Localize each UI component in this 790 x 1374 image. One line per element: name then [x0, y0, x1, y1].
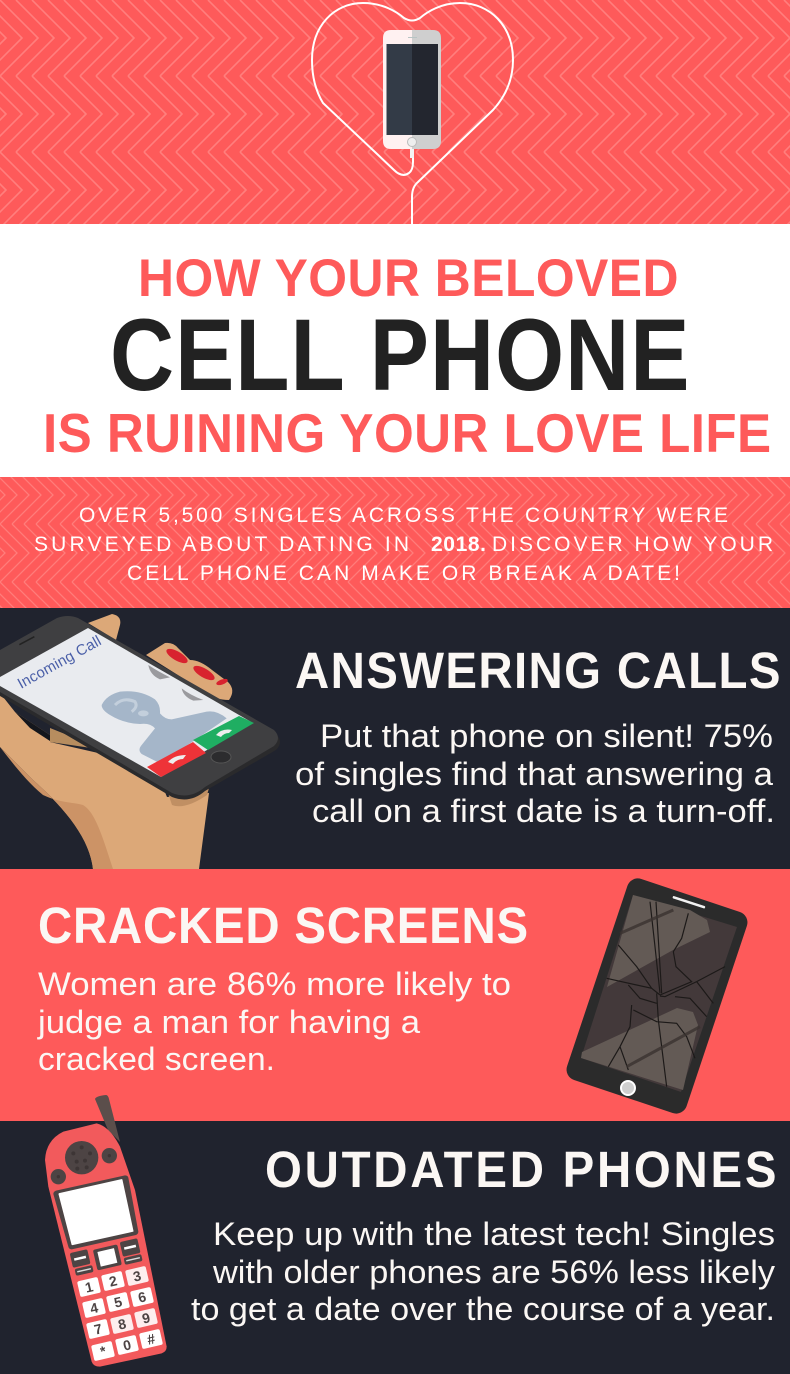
- keypad: 8: [116, 1315, 128, 1333]
- heading: is ruining your love life: IS RUINING YOUR LOVE LIFE: [43, 403, 771, 464]
- icon: hand holding phone with incoming call: [0, 614, 280, 869]
- text: outdated phones body: with older phones are 56% less likely: [212, 1254, 775, 1290]
- panel: header banner with heart cable and phone: [0, 0, 790, 224]
- keypad: 0: [121, 1336, 133, 1354]
- keypad: 5: [112, 1293, 124, 1311]
- panel: survey introduction: [0, 477, 790, 608]
- icon: smartphone: [383, 30, 441, 158]
- text: intro line 2 continued: DISCOVER HOW YOUR: [492, 533, 773, 556]
- text: cracked screens body: cracked screen.: [38, 1041, 275, 1077]
- text: outdated phones body: to get a date over the course of a year.: [191, 1291, 775, 1327]
- text: outdated phones body: Keep up with the latest tech! Singles: [213, 1216, 775, 1252]
- text: answering calls body: [295, 718, 775, 829]
- text: cracked screens body: judge a man for having a: [37, 1004, 420, 1040]
- panel: answering calls: [0, 608, 790, 869]
- text: intro line 2: SURVEYED ABOUT DATING IN: [34, 533, 409, 556]
- heading: how your beloved: HOW YOUR BELOVED: [138, 248, 678, 307]
- text: answering calls body: call on a first date is a turn-off.: [312, 793, 775, 829]
- keypad: 1: [83, 1278, 95, 1296]
- keypad: 7: [92, 1320, 104, 1338]
- keypad: 6: [136, 1288, 148, 1306]
- panel: white title area: [0, 224, 790, 477]
- text: cracked screens body: [37, 966, 511, 1077]
- text: incoming call label: Incoming Call: [15, 633, 104, 692]
- heading: cell phone: CELL PHONE: [110, 298, 689, 412]
- keypad: 4: [88, 1299, 100, 1317]
- text: intro line 3: CELL PHONE CAN MAKE OR BREAK A DATE!: [127, 562, 680, 585]
- text: cracked screens body: Women are 86% more likely to: [38, 966, 511, 1002]
- panel: outdated phones: [0, 1095, 790, 1374]
- icon: outdated red mobile phone: [45, 1095, 167, 1367]
- text: intro year: 2018.: [431, 533, 486, 556]
- text: outdated phones body: [191, 1216, 775, 1327]
- text: intro line 1: OVER 5,500 SINGLES ACROSS THE COUNTRY WERE: [79, 504, 728, 527]
- keypad: *: [99, 1342, 108, 1359]
- keypad: #: [145, 1330, 157, 1348]
- icon: heart shaped charging cable: [312, 3, 513, 224]
- keypad: 9: [140, 1309, 152, 1327]
- panel: cracked screens: [0, 869, 790, 1121]
- heading: outdated phones: OUTDATED PHONES: [265, 1141, 777, 1198]
- text: answering calls body: of singles find that answering a: [295, 756, 773, 792]
- keypad: 3: [131, 1267, 143, 1285]
- heading: answering calls: ANSWERING CALLS: [295, 642, 780, 699]
- icon: phone with cracked screen: [564, 875, 750, 1117]
- keypad: [77, 1266, 163, 1361]
- text: answering calls body: Put that phone on silent! 75%: [320, 718, 773, 754]
- keypad: 2: [107, 1272, 119, 1290]
- heading: cracked screens: CRACKED SCREENS: [38, 897, 528, 954]
